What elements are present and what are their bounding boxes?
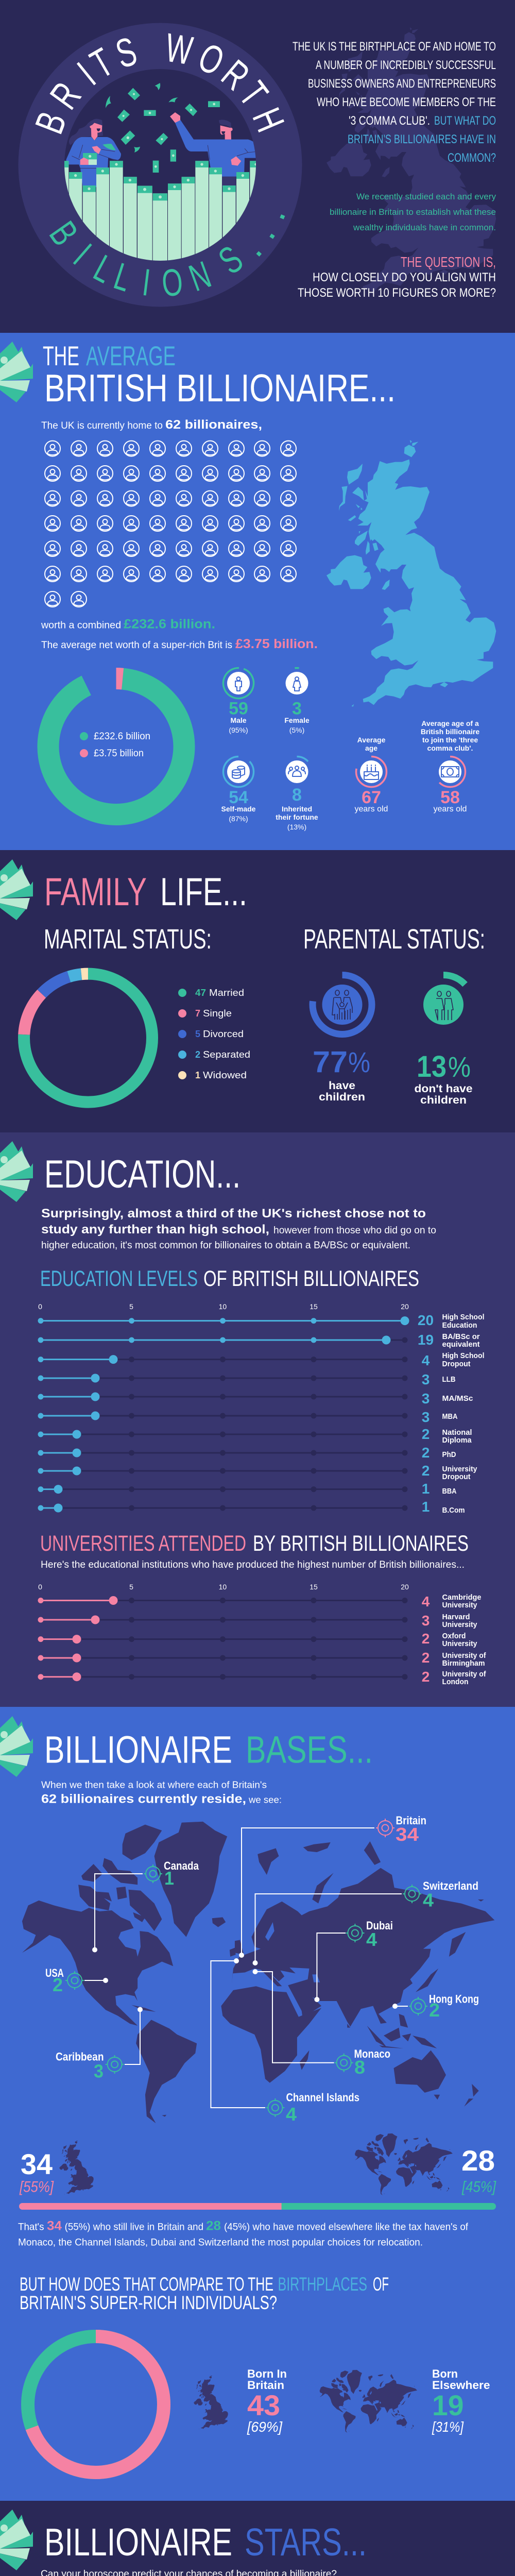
subheading: education levels: OF BRITISH BILLIONAIRES xyxy=(203,1266,419,1291)
axis labels: 15 xyxy=(310,1583,318,1591)
row: University Dropout: 2 xyxy=(422,1463,430,1479)
row: Harvard: University xyxy=(442,1620,477,1629)
map label: Switzerland: 4 xyxy=(423,1890,434,1910)
row: Oxford: Oxford xyxy=(442,1632,466,1640)
text: residence summary: (55%) who still live in Britain and xyxy=(65,2222,203,2233)
row: University Dropout: University xyxy=(442,1465,477,1473)
stat: female: Female xyxy=(284,716,310,724)
subheading: birthplaces: BRITAIN'S SUPER-RICH INDIVIDUALS? xyxy=(20,2292,277,2313)
row: University Dropout: Dropout xyxy=(442,1472,471,1481)
title: Brits Worth: O xyxy=(192,35,231,84)
stat: no children xyxy=(414,975,473,1106)
stat: no children: 13 xyxy=(417,1050,447,1083)
row: Birmingham: 2 xyxy=(422,1650,430,1666)
panel: the average British billionaire xyxy=(0,333,515,850)
legend: marital status: Separated xyxy=(203,1049,250,1060)
stat: have children: have xyxy=(329,1080,355,1092)
stat: born elsewhere: 19 xyxy=(432,2389,464,2421)
row: LLB xyxy=(38,1371,456,1387)
pictogram: 62 billionaires xyxy=(45,441,296,607)
stat: born elsewhere: [31%] xyxy=(432,2419,464,2435)
row: B.Com xyxy=(38,1499,465,1515)
map label: Dubai: 4 xyxy=(366,1929,377,1950)
axis labels xyxy=(38,1583,409,1591)
stat: born in Britain: Born In xyxy=(247,2367,287,2380)
map label: USA: 2 xyxy=(53,1974,63,1995)
heading: BRITISH BILLIONAIRE... xyxy=(44,366,396,410)
stat: age joining three comma club: Average age of a xyxy=(421,719,479,727)
stat: self-made: 54 xyxy=(229,788,248,807)
stat: no children: % xyxy=(448,1050,471,1083)
icon: money fan xyxy=(0,1716,33,1777)
stat: inherited: (13%) xyxy=(287,823,306,831)
world map xyxy=(22,1822,494,2123)
stat: age joining three comma club: British billionaire xyxy=(421,727,479,736)
stat: self-made xyxy=(217,750,260,823)
title: Billions xyxy=(41,199,294,305)
stat: born in Britain xyxy=(194,2367,287,2435)
stat: born in Britain: [69%] xyxy=(247,2419,283,2435)
map label: Monaco: 8 xyxy=(354,2057,365,2078)
split bar: residence xyxy=(19,2203,496,2210)
axis labels: 0 xyxy=(38,1583,42,1591)
legend: marital status: 2 xyxy=(195,1049,200,1060)
donut chart: birthplaces xyxy=(28,2336,164,2472)
row: Cambridge xyxy=(38,1593,481,1609)
axis labels: 5 xyxy=(129,1302,133,1311)
axis labels: 10 xyxy=(219,1302,227,1311)
lollipop chart: education levels xyxy=(38,1302,484,1515)
row: BA/BSc or equivalent xyxy=(38,1332,480,1349)
study description: wealthy individuals have in common. xyxy=(353,223,496,232)
text: residence summary: That's xyxy=(18,2222,44,2233)
row: Birmingham: Birmingham xyxy=(442,1659,485,1668)
man xyxy=(170,112,258,187)
stat: age joining three comma club: to join the 'three xyxy=(422,736,478,744)
subheading: birthplaces xyxy=(20,2274,389,2313)
title: Brits Worth: H xyxy=(244,102,293,138)
row: High School Dropout xyxy=(38,1351,484,1368)
text: combined and average worth: worth a combined xyxy=(41,620,121,631)
row: London: University of xyxy=(442,1670,486,1679)
row: National Diploma: Diploma xyxy=(442,1436,472,1445)
stat: no children: don't have xyxy=(414,1083,473,1095)
heading: LIFE... xyxy=(160,870,247,914)
subheading: universities attended xyxy=(40,1531,469,1556)
stat: self-made: Self-made xyxy=(221,805,256,813)
row: High School Dropout: Dropout xyxy=(442,1360,471,1368)
stat: inherited: their fortune xyxy=(276,813,318,821)
text: universities intro: Here's the educational institutions who have produced the highest number of British billionaires... xyxy=(41,1560,465,1570)
row: PhD xyxy=(38,1445,456,1461)
stat: female xyxy=(280,666,314,734)
text: residence summary xyxy=(18,2218,469,2248)
map label: Channel Islands: Channel Islands xyxy=(286,2091,359,2104)
panel: education xyxy=(0,1132,515,1707)
subheading: universities attended: UNIVERSITIES ATTENDED xyxy=(40,1531,246,1556)
map label: Hong Kong: Hong Kong xyxy=(429,1993,479,2006)
row: MA/MSc: MA/MSc xyxy=(442,1394,473,1403)
heading: BILLIONAIRE xyxy=(44,2520,232,2564)
UK map xyxy=(327,440,496,707)
title: Billions: I xyxy=(140,261,153,304)
text: 62 billionaires: 62 billionaires, xyxy=(165,418,262,432)
row: High School Dropout: 4 xyxy=(422,1352,430,1368)
stat: male xyxy=(219,664,258,734)
stat: male: (95%) xyxy=(229,726,248,734)
heading: THE xyxy=(43,341,79,371)
row: London: London xyxy=(442,1677,469,1686)
map label: Britain: Britain xyxy=(396,1814,426,1827)
stat: average age: 67 xyxy=(362,788,381,807)
heading: STARS... xyxy=(245,2520,367,2564)
row: Cambridge: Cambridge xyxy=(442,1593,481,1602)
row: BA/BSc or equivalent: BA/BSc or xyxy=(442,1332,480,1341)
stat: female: 3 xyxy=(292,699,302,719)
stat: living elsewhere xyxy=(355,2133,496,2196)
subheading: marital status: MARITAL STATUS: xyxy=(44,924,212,955)
stat: male: Male xyxy=(230,716,247,724)
axis labels: 5 xyxy=(129,1583,133,1591)
study description: We recently studied each and every xyxy=(356,192,496,201)
stat: have children xyxy=(313,975,372,1103)
intro text: Surprisingly, almost a third of the UK's richest chose not to xyxy=(41,1207,426,1221)
map label: Dubai xyxy=(346,1919,393,1950)
map label: USA: USA xyxy=(45,1967,64,1979)
legend: marital status: 1 xyxy=(195,1070,200,1080)
stat: born in Britain: Britain xyxy=(247,2379,284,2392)
text: 62 billionaires xyxy=(41,418,262,432)
donut chart: marital status xyxy=(0,947,179,1129)
row: Birmingham: University of xyxy=(442,1651,486,1660)
subheading: birthplaces: BUT HOW DOES THAT COMPARE TO THE xyxy=(20,2274,273,2295)
intro text: higher education, it's most common for billionaires to obtain a BA/BSc or equivalent. xyxy=(41,1240,410,1251)
row: LLB: 3 xyxy=(422,1371,430,1387)
text: combined and average worth: The average net worth of a super-rich Brit is xyxy=(41,640,232,651)
stat: have children: children xyxy=(319,1091,365,1103)
stat: born elsewhere: Elsewhere xyxy=(432,2379,490,2392)
stat: living in Britain xyxy=(19,2140,94,2196)
title: Billions: . xyxy=(231,228,270,265)
legend: marital status: 47 xyxy=(195,988,206,998)
title: Billions: N xyxy=(183,252,216,300)
stat: have children: % xyxy=(348,1046,370,1078)
row: High School Education: 20 xyxy=(418,1312,434,1328)
row: High School Education: Education xyxy=(442,1321,477,1330)
row: National Diploma: 2 xyxy=(422,1426,430,1442)
woman xyxy=(66,119,121,187)
intro text xyxy=(41,1207,436,1251)
icon: family xyxy=(332,990,352,1020)
subheading: education levels xyxy=(40,1266,419,1291)
stat: living elsewhere: 28 xyxy=(461,2144,495,2177)
panel: billionaire bases xyxy=(0,1707,515,2501)
stat: average age: years old xyxy=(355,805,388,814)
map label: Dubai: Dubai xyxy=(366,1919,393,1932)
map label: Caribbean xyxy=(56,2050,124,2082)
row: High School Education: High School xyxy=(442,1313,484,1321)
text: combined and average worth: £3.75 billion. xyxy=(235,637,318,651)
legend: marital status: Married xyxy=(209,988,244,998)
text: residence summary: 34 xyxy=(47,2218,62,2233)
closing question xyxy=(298,254,496,300)
background UK map xyxy=(327,27,496,294)
map label: Switzerland xyxy=(403,1879,478,1910)
heading: FAMILY xyxy=(44,870,147,914)
row: PhD: 2 xyxy=(422,1445,430,1461)
stat: inherited: 8 xyxy=(292,785,302,805)
donut chart: total and average worth xyxy=(42,672,191,821)
stat: inherited: Inherited xyxy=(282,805,312,813)
row: Cambridge: 4 xyxy=(422,1594,430,1609)
title: Billions: S xyxy=(211,237,250,282)
legend: marital status: 7 xyxy=(195,1008,200,1019)
title: Brits Worth: B xyxy=(27,106,75,140)
stat: age joining three comma club: comma club'. xyxy=(427,744,473,752)
heading xyxy=(44,870,247,914)
text: combined and average worth xyxy=(41,617,318,651)
title: Brits Worth: I xyxy=(70,54,104,94)
row: BBA: BBA xyxy=(442,1487,457,1496)
world map small xyxy=(320,2370,417,2433)
map label: Caribbean: Caribbean xyxy=(56,2050,104,2063)
icon: money fan xyxy=(0,2510,33,2570)
row: B.Com: B.Com xyxy=(442,1506,465,1515)
row: BA/BSc or equivalent: equivalent xyxy=(442,1340,480,1349)
map label: Monaco: Monaco xyxy=(354,2047,390,2060)
axis labels: 0 xyxy=(38,1302,42,1311)
row: MA/MSc xyxy=(38,1391,473,1406)
map label: Switzerland: Switzerland xyxy=(423,1879,478,1892)
stat: have children: 77 xyxy=(313,1045,348,1079)
legend: marital status: 5 xyxy=(195,1029,200,1039)
map label: Canada xyxy=(144,1859,199,1889)
stat: inherited xyxy=(276,756,318,831)
intro text xyxy=(41,1780,282,1806)
stat: average age: age xyxy=(365,744,377,752)
icon: couple xyxy=(435,991,453,1020)
title: Brits Worth xyxy=(27,25,293,140)
panel: billionaire stars xyxy=(0,2501,515,2576)
text: combined and average worth: £232.6 billion. xyxy=(124,617,215,632)
row: Cambridge: University xyxy=(442,1601,477,1609)
panel: family life xyxy=(0,850,515,1132)
row: High School Education xyxy=(38,1312,484,1330)
title: Billions: . xyxy=(250,199,294,226)
intro text: study any further than high school, xyxy=(41,1223,269,1236)
row: Oxford: 2 xyxy=(422,1631,430,1647)
row: University Dropout xyxy=(38,1463,477,1481)
title: Brits Worth: T xyxy=(230,74,277,114)
row: BBA xyxy=(38,1481,457,1497)
title: Billions: O xyxy=(160,260,185,305)
icon: money fan xyxy=(0,859,33,920)
title: Billions: I xyxy=(65,235,99,273)
donut chart: total and average worth: £232.6 billion xyxy=(94,731,150,742)
stat: living elsewhere: [45%] xyxy=(461,2178,496,2196)
donut chart: total and average worth: £3.75 billion xyxy=(94,748,144,759)
intro text: however from those who did go on to xyxy=(273,1225,436,1236)
heading: BASES... xyxy=(246,1728,373,1771)
study description: billionaire in Britain to establish what these xyxy=(330,207,496,217)
bar chart of stacked notes xyxy=(64,161,256,261)
connector lines xyxy=(84,1828,408,2108)
stat: living in Britain: [55%] xyxy=(19,2178,54,2196)
row: Harvard xyxy=(38,1613,477,1629)
intro text: 62 billionaires currently reside, xyxy=(41,1792,246,1806)
connector end points xyxy=(92,1947,398,2012)
row: MA/MSc: 3 xyxy=(422,1391,430,1406)
UK map small xyxy=(194,2375,228,2429)
lollipop chart: universities xyxy=(38,1583,486,1686)
icon: money fan xyxy=(0,342,33,402)
row: MBA xyxy=(38,1409,458,1425)
map label: Monaco xyxy=(335,2047,390,2078)
intro text xyxy=(293,40,496,165)
heading: EDUCATION... xyxy=(44,1153,241,1196)
text: residence summary: (45%) who have moved elsewhere like the tax haven's of xyxy=(224,2222,469,2233)
row: Oxford xyxy=(38,1631,477,1648)
row: LLB: LLB xyxy=(442,1375,456,1384)
intro text: When we then take a look at where each of Britain's xyxy=(41,1780,267,1790)
intro text: '3 COMMA CLUB'. xyxy=(349,114,430,128)
row: PhD: PhD xyxy=(442,1450,456,1459)
row: BBA: 1 xyxy=(422,1481,430,1497)
subheading: birthplaces: OF xyxy=(373,2274,389,2295)
row: Birmingham xyxy=(38,1650,486,1668)
row: MBA: 3 xyxy=(422,1409,430,1425)
legend: marital status xyxy=(178,988,250,1080)
stat: age joining three comma club: 58 xyxy=(440,788,460,807)
axis labels: 10 xyxy=(219,1583,227,1591)
text: 62 billionaires: The UK is currently home to xyxy=(41,420,163,431)
map label: Channel Islands: 4 xyxy=(286,2104,297,2125)
map label: Canada: 1 xyxy=(164,1868,174,1889)
falling bank notes xyxy=(106,83,220,173)
stat: living in Britain: 34 xyxy=(21,2148,53,2180)
map label: Channel Islands xyxy=(266,2091,359,2125)
stat: self-made: (87%) xyxy=(229,815,248,823)
intro text: COMMON? xyxy=(448,151,496,165)
heading xyxy=(43,341,396,410)
intro text: we see: xyxy=(248,1795,282,1805)
title: Brits Worth: R xyxy=(213,52,258,99)
world map small xyxy=(355,2133,453,2195)
map label: Hong Kong xyxy=(409,1993,479,2021)
heading: BILLIONAIRE xyxy=(44,1728,232,1771)
stat: female: (5%) xyxy=(289,726,304,734)
heading: AVERAGE xyxy=(86,341,176,371)
map label: Britain: 34 xyxy=(396,1824,419,1845)
text: residence summary: 28 xyxy=(206,2218,221,2233)
axis labels: 20 xyxy=(401,1302,409,1311)
icon: money fan xyxy=(0,1141,33,1202)
row: BA/BSc or equivalent: 19 xyxy=(418,1332,434,1348)
row: London: 2 xyxy=(422,1669,430,1685)
map label: Caribbean: 3 xyxy=(94,2061,104,2082)
stat: no children: children xyxy=(420,1094,467,1106)
map label: Canada: Canada xyxy=(164,1859,199,1872)
text: residence summary: Monaco, the Channel Islands, Dubai and Switzerland the most popular choices for relocation. xyxy=(18,2238,423,2248)
stat: average age xyxy=(355,736,388,814)
legend: marital status: Divorced xyxy=(203,1029,244,1039)
subheading: birthplaces: BIRTHPLACES xyxy=(278,2274,367,2295)
stat: born elsewhere xyxy=(320,2367,490,2435)
stat: born in Britain: 43 xyxy=(247,2389,280,2421)
stat: average age: Average xyxy=(357,736,386,744)
stat: born elsewhere: Born xyxy=(432,2367,458,2380)
title: Billions: . xyxy=(242,214,284,246)
study description xyxy=(330,192,496,232)
title: Brits Worth: R xyxy=(42,74,90,117)
row: High School Dropout: High School xyxy=(442,1351,484,1360)
legend: marital status: Widowed xyxy=(203,1070,247,1080)
subheading: education levels: EDUCATION LEVELS xyxy=(40,1266,198,1291)
title: Billions: B xyxy=(41,214,87,253)
title: Brits Worth: T xyxy=(83,40,121,87)
row: B.Com: 1 xyxy=(422,1499,430,1515)
axis labels xyxy=(38,1302,409,1311)
row: Oxford: University xyxy=(442,1639,477,1648)
map label: Britain xyxy=(376,1814,426,1845)
title badge ring xyxy=(19,23,302,307)
axis labels: 15 xyxy=(310,1302,318,1311)
map label: USA xyxy=(45,1967,84,1995)
stat: age joining three comma club: years old xyxy=(434,805,467,814)
title: Brits Worth: S xyxy=(111,29,142,77)
panel: header xyxy=(19,23,496,307)
UK map small xyxy=(59,2140,94,2194)
title: Billions: L xyxy=(109,255,136,300)
illustration: billionaires and bar chart of bank notes xyxy=(64,83,256,261)
stat: male: 59 xyxy=(229,699,248,719)
map label: Hong Kong: 2 xyxy=(429,1999,440,2021)
row: Harvard: Harvard xyxy=(442,1613,470,1621)
axis labels: 20 xyxy=(401,1583,409,1591)
row: National Diploma xyxy=(38,1426,472,1445)
row: MBA: MBA xyxy=(442,1412,458,1421)
title: Billions: L xyxy=(87,246,121,291)
row: Harvard: 3 xyxy=(422,1613,430,1629)
row: National Diploma: National xyxy=(442,1428,472,1437)
row: London xyxy=(38,1669,486,1686)
legend: marital status: Single xyxy=(203,1008,232,1019)
title: Brits Worth: W xyxy=(162,25,196,74)
stat: age joining three comma club xyxy=(421,719,479,814)
